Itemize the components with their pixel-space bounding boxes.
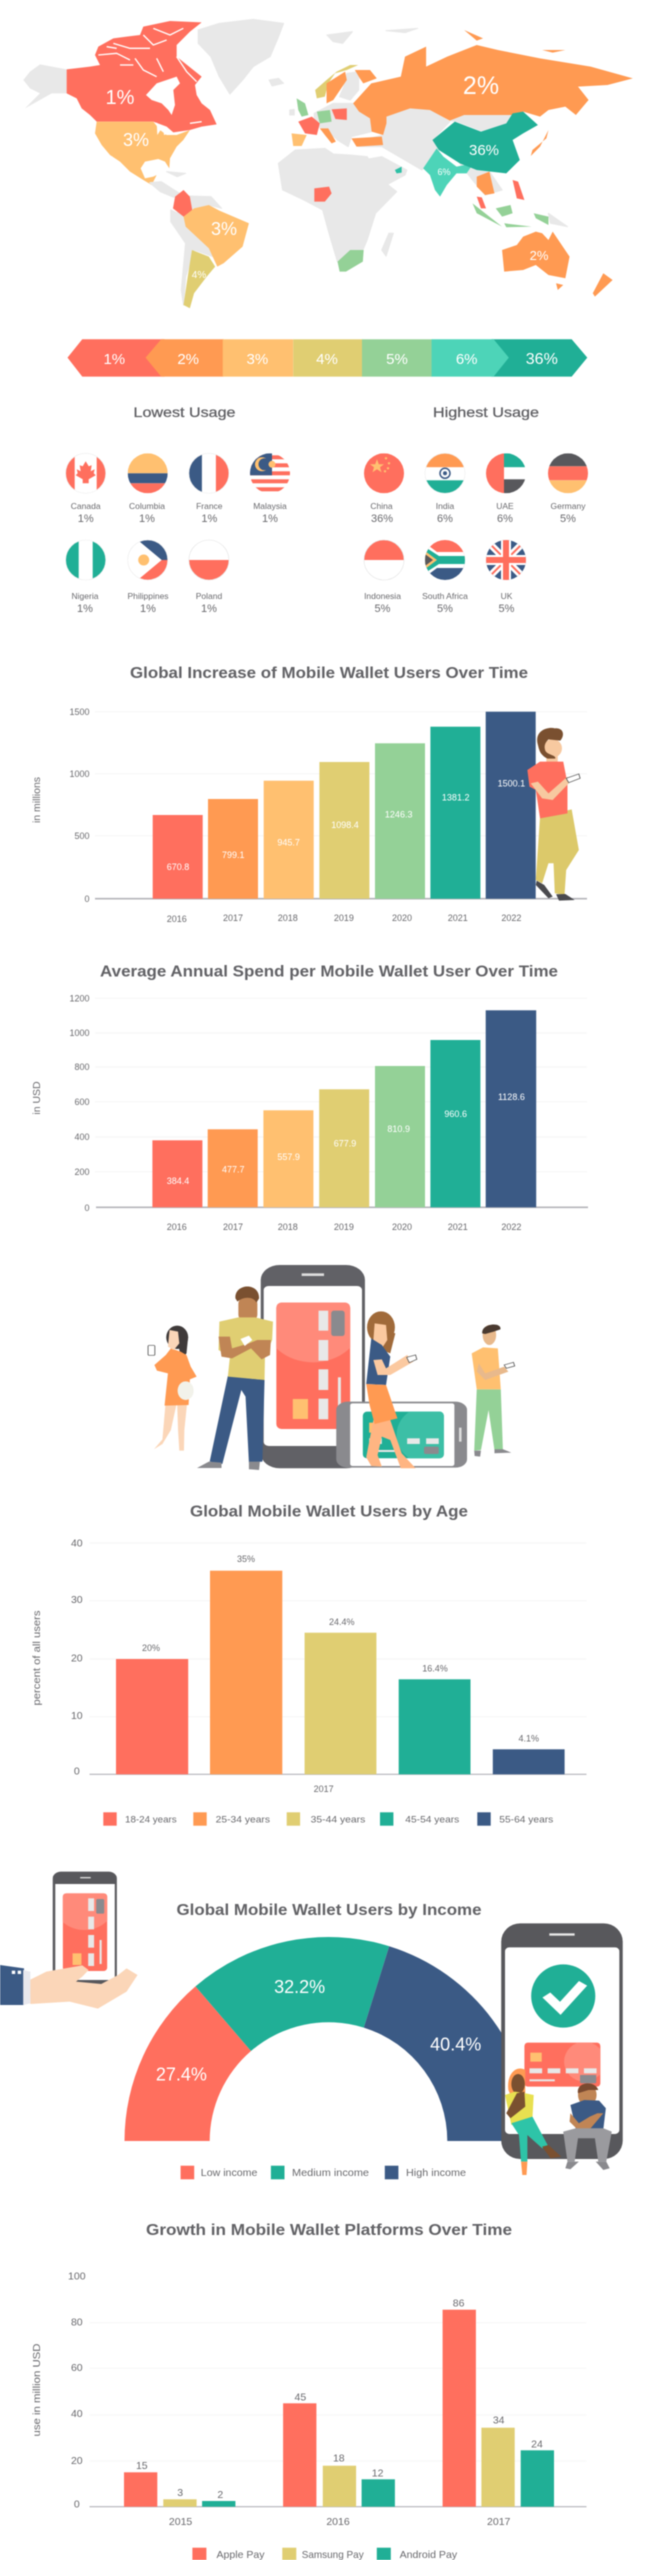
group: 2015: 2 — [217, 2489, 223, 2501]
yellow countries — [184, 65, 358, 308]
bar chart axes: 20 — [71, 2455, 83, 2467]
country labels: 1% — [262, 513, 278, 525]
legend: 25-34 years — [216, 1814, 271, 1824]
red countries — [173, 108, 524, 217]
map labels: 2% — [530, 248, 549, 263]
country labels: 6% — [497, 513, 513, 525]
title: Global Mobile Wallet Users by Income — [176, 1902, 482, 1919]
uae — [395, 167, 402, 173]
map labels: 6% — [437, 167, 451, 177]
icon: check mark — [531, 1964, 595, 2028]
bar chart axes: 200 — [74, 1167, 90, 1177]
bar chart axes: 400 — [74, 1132, 90, 1142]
year labels — [167, 913, 521, 924]
bar chart axes: 0 — [74, 2498, 80, 2510]
country labels: Canada — [71, 501, 101, 511]
country labels: Indonesia — [364, 591, 401, 601]
bar chart axes: 0 — [74, 1766, 80, 1778]
green countries — [297, 98, 548, 272]
bars: 1381.2 — [442, 792, 469, 802]
bar chart axes — [31, 707, 587, 904]
bars: 677.9 — [334, 1138, 356, 1148]
legend ribbon: 3% — [247, 351, 268, 368]
bar chart axes: 10 — [71, 1710, 83, 1722]
bars — [116, 1554, 565, 1774]
illustration: people with phones and cards — [148, 1265, 515, 1470]
bars: 799.1 — [222, 850, 245, 860]
bar chart axes: percent of all users — [31, 1610, 43, 1706]
heading: highest usage: Highest Usage — [433, 404, 539, 420]
panel: wallet platforms — [31, 2222, 586, 2560]
year labels: 2021 — [448, 913, 468, 923]
country labels: Poland — [196, 591, 223, 601]
bar chart axes: 100 — [68, 2270, 86, 2282]
bars: 1246.3 — [385, 810, 412, 820]
group: 2017: 2017 — [487, 2516, 511, 2528]
north america — [23, 21, 217, 185]
country labels: France — [196, 501, 223, 511]
country labels: 1% — [77, 603, 93, 615]
panel: global increase of users — [31, 665, 587, 924]
flag: philippines — [138, 540, 168, 580]
bars — [152, 1010, 536, 1207]
map labels — [106, 72, 549, 281]
bars: 1500.1 — [498, 778, 525, 788]
year labels: 2018 — [278, 1222, 298, 1232]
map labels: 1% — [106, 87, 135, 109]
country labels: 5% — [437, 603, 453, 615]
group: 2017: 34 — [493, 2414, 505, 2426]
person: seated man — [563, 2075, 612, 2170]
flag: nigeria — [66, 540, 106, 580]
country labels: 5% — [375, 603, 391, 615]
panel: users by age — [31, 1504, 586, 1826]
country labels: India — [436, 501, 454, 511]
legend ribbon: 36% — [526, 351, 558, 368]
legend ribbon: 4% — [316, 351, 338, 368]
legend — [181, 2166, 466, 2179]
legend: 45-54 years — [405, 1814, 460, 1824]
year labels: 2020 — [392, 1222, 412, 1232]
year labels: 2016 — [167, 1222, 187, 1232]
country labels: Malaysia — [253, 501, 287, 511]
world map — [23, 19, 633, 308]
panel: users by income — [0, 1872, 623, 2179]
year labels: 2022 — [501, 913, 521, 923]
year labels: 2017 — [223, 1222, 243, 1232]
legend ribbon — [68, 339, 587, 377]
credit card — [524, 2042, 605, 2087]
group: 2016 — [283, 2392, 395, 2528]
flag: malaysia — [250, 453, 290, 493]
country labels: Columbia — [129, 501, 165, 511]
bars: 1128.6 — [498, 1092, 525, 1102]
light orange countries — [184, 133, 307, 267]
country labels: South Africa — [422, 591, 468, 601]
country labels: China — [370, 501, 393, 511]
group: 2017 — [443, 2298, 554, 2528]
bar chart axes: 30 — [71, 1594, 83, 1606]
flags: highest usage — [364, 453, 588, 580]
bars: 384.4 — [167, 1176, 189, 1186]
legend ribbon: 2% — [177, 351, 199, 368]
bar chart axes — [31, 994, 588, 1213]
year labels: 2019 — [334, 1222, 354, 1232]
year labels: 2020 — [392, 913, 412, 923]
bar chart axes: use in million USD — [31, 2343, 43, 2437]
legend ribbon: 5% — [386, 351, 408, 368]
bars: 4.1% — [518, 1734, 539, 1744]
country labels: Germany — [551, 501, 586, 511]
group: 2016: 18 — [333, 2452, 345, 2464]
bars: 670.8 — [167, 862, 189, 872]
group: 2016: 12 — [372, 2468, 384, 2480]
person: man in yellow shirt — [197, 1286, 273, 1470]
bars: 810.9 — [387, 1124, 410, 1134]
semicircle chart: 32.2% — [274, 1977, 325, 1997]
flag: indonesia — [364, 540, 404, 561]
country labels: 36% — [371, 513, 393, 525]
india — [423, 148, 473, 197]
flags: lowest usage — [66, 453, 290, 580]
bars: 16.4% — [422, 1664, 448, 1674]
bar chart axes: 1500 — [69, 707, 90, 717]
country labels: 6% — [437, 513, 453, 525]
legend: 18-24 years — [125, 1814, 177, 1824]
illustration: man leaning on bar — [527, 728, 580, 901]
heading: lowest usage: Lowest Usage — [134, 404, 236, 420]
bar chart axes: 500 — [74, 831, 90, 841]
flag: canada — [65, 456, 106, 490]
legend ribbon: 1% — [103, 351, 125, 368]
bars: 1098.4 — [331, 820, 359, 830]
country labels: 1% — [140, 603, 156, 615]
year labels — [167, 1222, 521, 1232]
map labels: 3% — [123, 130, 149, 150]
bar chart axes: 800 — [74, 1062, 90, 1072]
year labels: 2019 — [334, 913, 354, 923]
country labels: 1% — [78, 513, 94, 525]
large phone — [261, 1265, 365, 1468]
illustration: hand holding phone — [0, 1872, 138, 2009]
bar chart axes: 40 — [71, 1538, 83, 1550]
flag: india — [425, 453, 465, 493]
country labels — [71, 501, 586, 615]
title: Global Increase of Mobile Wallet Users Over Time — [130, 665, 528, 682]
bars: 477.7 — [222, 1164, 245, 1174]
flag: south africa — [425, 540, 465, 580]
bar chart axes: 0 — [84, 894, 90, 904]
country labels: 1% — [139, 513, 155, 525]
bar chart axes: in USD — [31, 1081, 43, 1115]
bars — [153, 712, 536, 899]
legend: 35-44 years — [311, 1814, 366, 1824]
legend ribbon: 6% — [456, 351, 478, 368]
year labels: 2017 — [223, 913, 243, 923]
bars: 945.7 — [277, 838, 300, 848]
country labels: 1% — [201, 603, 217, 615]
horizontal phone — [336, 1402, 467, 1468]
country labels: 5% — [560, 513, 576, 525]
group: 2016: 2016 — [326, 2516, 350, 2528]
legend: 55-64 years — [499, 1814, 554, 1824]
bar chart axes: 1200 — [69, 994, 90, 1004]
group: 2017: 24 — [531, 2438, 543, 2450]
person: woman in orange dress — [148, 1326, 197, 1451]
bar chart axes: 80 — [71, 2316, 83, 2328]
bar chart axes: 1000 — [69, 1028, 90, 1038]
year labels: 2021 — [448, 1222, 468, 1232]
group: 2015: 2015 — [169, 2516, 192, 2528]
legend: Medium income — [292, 2167, 369, 2179]
bar chart axes: 0 — [84, 1203, 90, 1213]
flag: germany — [548, 453, 588, 493]
bars: 20% — [142, 1643, 160, 1653]
title: Global Mobile Wallet Users by Age — [190, 1504, 468, 1520]
person: seated woman — [505, 2069, 561, 2175]
year labels: 2018 — [278, 913, 298, 923]
title: Growth in Mobile Wallet Platforms Over Time — [146, 2222, 512, 2239]
bar chart axes: 1000 — [69, 769, 90, 779]
bars: 960.6 — [444, 1109, 467, 1119]
country labels: UK — [501, 591, 513, 601]
year labels: 2022 — [501, 1222, 521, 1232]
gray countries — [150, 19, 567, 305]
bars: 35% — [237, 1554, 255, 1564]
legend: Low income — [201, 2167, 258, 2179]
group: 2016: 45 — [295, 2392, 306, 2404]
map labels: 36% — [469, 142, 499, 159]
bars: 557.9 — [277, 1152, 300, 1162]
group: 2015 — [124, 2460, 235, 2528]
country labels: Nigeria — [72, 591, 99, 601]
bars: 24.4% — [329, 1617, 355, 1627]
flag: poland — [188, 559, 230, 580]
person: man in green trousers — [472, 1325, 515, 1457]
country labels: Philippines — [127, 591, 169, 601]
year labels: 2016 — [167, 914, 187, 924]
group: 2017: 86 — [453, 2298, 465, 2310]
flag: uae — [486, 453, 526, 493]
title: Average Annual Spend per Mobile Wallet User Over Time — [100, 964, 558, 980]
legend: High income — [406, 2167, 466, 2179]
illustration: phone with check mark and seated people — [501, 1923, 623, 2175]
group: 2015: 15 — [136, 2460, 148, 2472]
country labels: UAE — [496, 501, 514, 511]
bar chart axes — [31, 1538, 586, 1778]
flag: france — [189, 453, 229, 493]
semicircle chart: 27.4% — [156, 2064, 207, 2084]
semicircle chart — [124, 1937, 532, 2141]
legend — [192, 2548, 458, 2560]
group: 2015: 3 — [177, 2487, 183, 2499]
semicircle chart: 40.4% — [430, 2034, 481, 2054]
flag: colombia — [128, 453, 168, 493]
country labels: 5% — [499, 603, 515, 615]
map labels: 2% — [463, 72, 499, 100]
bar chart axes: 60 — [71, 2362, 83, 2374]
legend — [103, 1812, 554, 1826]
map labels: 3% — [211, 219, 237, 239]
map labels: 4% — [192, 270, 206, 281]
person: woman with navy top — [366, 1311, 417, 1468]
country labels: 1% — [201, 513, 217, 525]
panel: average annual spend — [31, 964, 588, 1232]
bar chart axes: 20 — [71, 1652, 83, 1664]
flag: china — [364, 453, 404, 493]
category label: 2017 — [314, 1784, 334, 1794]
bar chart axes: 40 — [71, 2408, 83, 2420]
bar chart axes: 600 — [74, 1097, 90, 1107]
flag: uk — [486, 540, 526, 580]
orange countries — [320, 30, 633, 297]
bar chart axes: in millions — [31, 777, 43, 823]
bar chart axes — [31, 2270, 586, 2510]
china — [432, 112, 538, 173]
